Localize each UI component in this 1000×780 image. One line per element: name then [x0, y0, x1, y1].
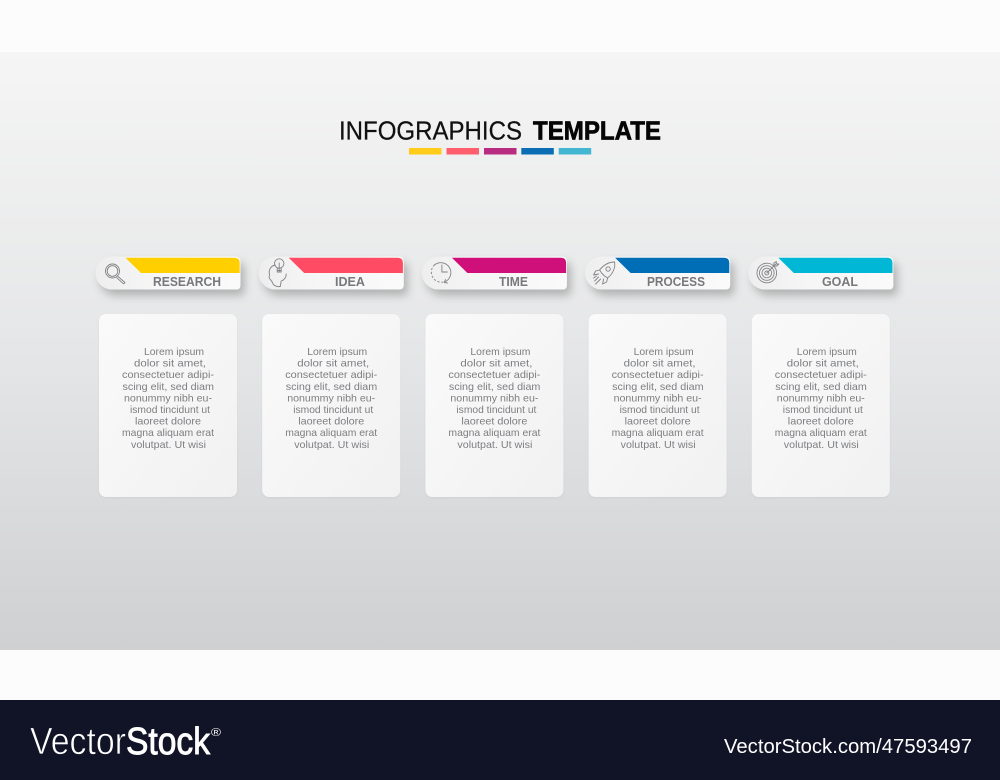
body text: Lorem ipsum: [307, 347, 367, 358]
body text: ismod tincidunt ut: [293, 405, 373, 416]
body text: volutpat. Ut wisi: [457, 440, 532, 451]
body text: [122, 347, 214, 451]
body text: dolor sit amet,: [787, 359, 859, 370]
body text: magna aliquam erat: [122, 428, 214, 439]
title: [339, 116, 661, 146]
column: idea: [259, 256, 404, 497]
icon: target: [757, 262, 779, 283]
icon: head with bulb: [269, 259, 286, 287]
column: time: [422, 256, 567, 497]
body text: [448, 347, 541, 451]
body text: Lorem ipsum: [144, 347, 204, 358]
label: time: TIME: [499, 274, 528, 289]
label: idea: IDEA: [335, 274, 366, 289]
body text: dolor sit amet,: [460, 359, 532, 370]
body text: consectetuer adipi-: [285, 370, 377, 381]
body text: magna aliquam erat: [285, 428, 377, 439]
column: process: [585, 256, 730, 497]
body text: laoreet dolore: [625, 417, 691, 428]
body text: ismod tincidunt ut: [783, 405, 863, 416]
body text: ismod tincidunt ut: [456, 405, 537, 416]
tab: time: [422, 256, 567, 290]
body text: consectetuer adipi-: [612, 370, 704, 381]
body text: Lorem ipsum: [470, 347, 530, 358]
body text: nonummy nibh eu-: [124, 393, 212, 404]
colour key bars: [409, 148, 591, 154]
label: research: RESEARCH: [153, 274, 221, 289]
body text: consectetuer adipi-: [122, 370, 214, 381]
body text: ismod tincidunt ut: [130, 405, 210, 416]
body text: scing elit, sed diam: [612, 382, 704, 393]
body text: scing elit, sed diam: [122, 382, 214, 393]
tab: research: [96, 256, 240, 290]
body text: dolor sit amet,: [624, 359, 696, 370]
footer logo: [30, 721, 221, 763]
body text: volutpat. Ut wisi: [131, 440, 206, 451]
body text: Lorem ipsum: [634, 347, 694, 358]
icon: clock: [431, 263, 451, 283]
footer url: VectorStock.com/47593497: [724, 736, 972, 758]
card: time: [425, 314, 563, 497]
label: process: PROCESS: [647, 274, 705, 289]
body text: scing elit, sed diam: [449, 382, 540, 393]
body text: nonummy nibh eu-: [450, 393, 538, 404]
body text: consectetuer adipi-: [448, 370, 540, 381]
body text: dolor sit amet,: [134, 359, 206, 370]
body text: magna aliquam erat: [775, 428, 867, 439]
title: TEMPLATE: [533, 116, 661, 146]
body text: magna aliquam erat: [612, 428, 704, 439]
icon: magnifier: [106, 264, 125, 284]
body text: volutpat. Ut wisi: [294, 440, 369, 451]
body text: magna aliquam erat: [448, 428, 541, 439]
body text: scing elit, sed diam: [286, 382, 377, 393]
footer logo: ®: [211, 727, 221, 739]
gradient panel: [0, 52, 1000, 650]
card: process: [589, 314, 727, 497]
tab: idea: [259, 256, 404, 290]
body text: laoreet dolore: [788, 417, 854, 428]
body text: volutpat. Ut wisi: [621, 440, 696, 451]
icon: rocket: [594, 262, 615, 284]
tab: process: [585, 256, 730, 290]
card: research: [99, 314, 237, 497]
body text: dolor sit amet,: [297, 359, 369, 370]
column: goal: [748, 256, 893, 497]
label: goal: GOAL: [822, 274, 858, 289]
body text: laoreet dolore: [461, 417, 528, 428]
card: goal: [752, 314, 890, 497]
tab: goal: [748, 256, 893, 290]
body text: nonummy nibh eu-: [614, 393, 702, 404]
body text: nonummy nibh eu-: [777, 393, 865, 404]
title: INFOGRAPHICS: [339, 116, 522, 146]
body text: [285, 347, 377, 451]
body text: ismod tincidunt ut: [620, 405, 700, 416]
body text: [612, 347, 704, 451]
body text: nonummy nibh eu-: [287, 393, 375, 404]
body text: laoreet dolore: [298, 417, 364, 428]
body text: [775, 347, 867, 451]
body text: laoreet dolore: [135, 417, 201, 428]
card: idea: [262, 314, 400, 497]
footer logo: Stock: [126, 721, 211, 763]
footer bar: [0, 700, 1000, 780]
body text: Lorem ipsum: [797, 347, 857, 358]
column: research: [96, 256, 240, 497]
body text: consectetuer adipi-: [775, 370, 867, 381]
body text: volutpat. Ut wisi: [784, 440, 859, 451]
body text: scing elit, sed diam: [775, 382, 867, 393]
footer logo: Vector: [30, 721, 126, 763]
